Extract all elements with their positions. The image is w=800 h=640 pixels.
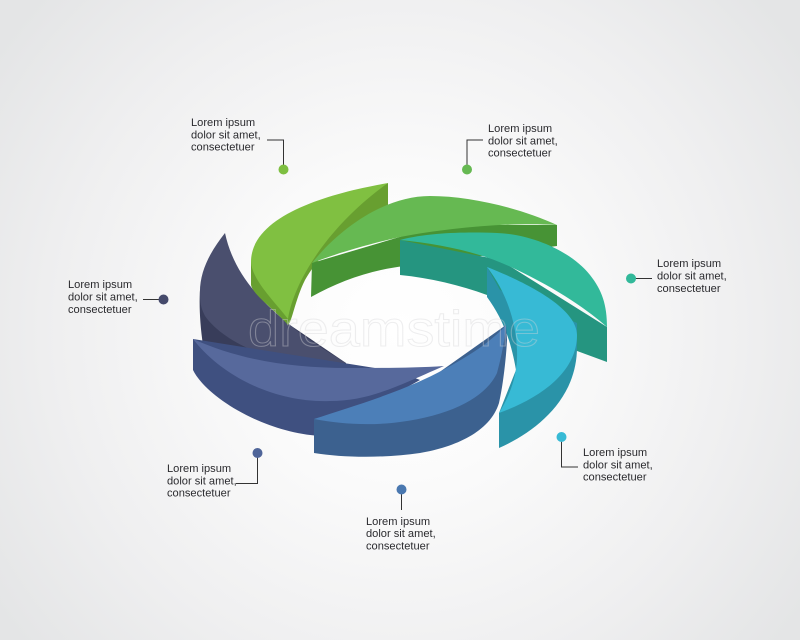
callout: green: [462, 123, 558, 174]
callout: navy: Lorem ipsum: [68, 279, 132, 291]
segment 3: teal: [400, 233, 607, 362]
callout: cyan: [556, 432, 653, 484]
callout: blue: consectetuer: [366, 540, 430, 552]
callout: light green: consectetuer: [191, 142, 255, 154]
callout: green: Lorem ipsum: [488, 123, 552, 135]
callout: teal: Lorem ipsum: [657, 258, 721, 270]
callout: teal: [626, 258, 727, 295]
callout: green: consectetuer: [488, 148, 552, 160]
segment 4: cyan: [487, 267, 577, 448]
callout: blue: dolor sit amet,: [366, 528, 436, 540]
callout: light green: Lorem ipsum: [191, 117, 255, 129]
callout: navy: dolor sit amet,: [68, 292, 138, 304]
callout: green: dolor sit amet,: [488, 136, 558, 148]
callout: teal: consectetuer: [657, 283, 721, 295]
segment 1: light green: [251, 183, 388, 325]
watermark: dreamstime: [248, 301, 540, 357]
segment 5: blue: [314, 325, 507, 457]
callout: cyan: Lorem ipsum: [583, 447, 647, 459]
callout: navy: [68, 279, 168, 316]
segment 2: green: [311, 196, 557, 297]
callout: teal: dolor sit amet,: [657, 270, 727, 282]
callout: blue: [366, 484, 436, 552]
callout: cyan: dolor sit amet,: [583, 460, 653, 472]
callout: slate blue: dolor sit amet,: [167, 476, 237, 488]
segment 7: navy: [200, 233, 346, 368]
callout: navy: consectetuer: [68, 304, 132, 316]
segment 6: slate blue: [193, 339, 444, 436]
callout: blue: Lorem ipsum: [366, 516, 430, 528]
callout: light green: [191, 117, 288, 174]
callout: slate blue: Lorem ipsum: [167, 463, 231, 475]
callout: slate blue: consectetuer: [167, 488, 231, 500]
callout: light green: dolor sit amet,: [191, 130, 261, 142]
callout: cyan: consectetuer: [583, 472, 647, 484]
callout: slate blue: [167, 448, 262, 500]
